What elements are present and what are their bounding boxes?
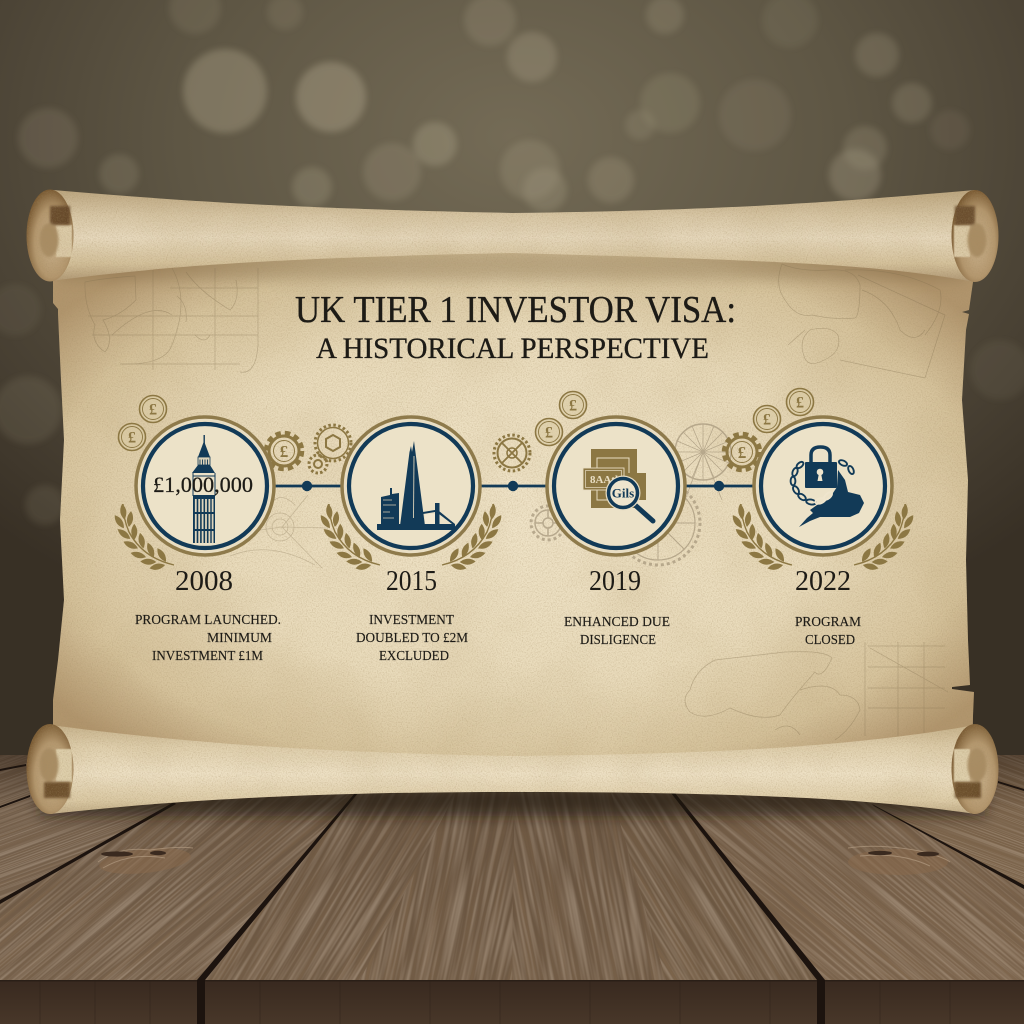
icon: faint gear right (616, 481, 700, 565)
icon: documents and magnifier: Gils (612, 486, 634, 500)
faint map: top right (779, 264, 945, 378)
icon: laurel (112, 503, 174, 571)
milestone 2015 (318, 417, 504, 664)
milestone 2022 (730, 417, 916, 648)
faint map: top left (85, 268, 258, 372)
description: CLOSED (805, 633, 855, 648)
table front edge (0, 980, 1024, 1024)
year: 2008 (175, 566, 233, 597)
icon: medallion (342, 417, 480, 555)
icon: documents and magnifier: 8AAtl (590, 475, 618, 486)
description: MINIMUM (207, 631, 273, 646)
decorative gears (118, 388, 814, 473)
icon: pound gear 2008: £ (280, 442, 288, 461)
plank gaps (0, 764, 1024, 980)
wood knots (98, 844, 950, 878)
description: ENHANCED DUE (564, 615, 670, 630)
scroll (20, 185, 1005, 820)
parchment ageing texture (20, 185, 1005, 820)
title (295, 289, 736, 365)
icon: England map, padlock and chain (791, 447, 864, 527)
year: 2022 (795, 566, 851, 597)
icon: Big Ben (192, 435, 215, 543)
icon: faint gear left (531, 506, 565, 540)
icon: hex gear (315, 425, 351, 461)
parchment sheet (53, 250, 974, 770)
description (564, 615, 670, 648)
icon: pound gear 2022: £ (738, 443, 746, 462)
icon: ferris wheel (675, 424, 731, 500)
background gears and wheel (531, 424, 731, 565)
description (135, 613, 281, 664)
icon: medallion (547, 417, 685, 555)
year: 2019 (589, 566, 641, 597)
icon: laurels (730, 503, 916, 571)
faint map: bottom right (685, 642, 948, 740)
title: A HISTORICAL PERSPECTIVE (316, 332, 709, 365)
icon: coins (118, 388, 814, 450)
background with bokeh lights (0, 0, 1024, 760)
wooden table (0, 755, 1024, 1024)
bottom roll (26, 724, 998, 814)
icon: medallion (754, 417, 892, 555)
top roll (26, 190, 998, 282)
description: INVESTMENT (369, 613, 454, 628)
amount on clock tower: £1,000,000 (153, 472, 253, 497)
description: INVESTMENT £1M (152, 649, 264, 664)
description: DISLIGENCE (580, 633, 656, 648)
description: PROGRAM LAUNCHED. (135, 613, 281, 628)
faint sketch: compass behind timeline (225, 495, 328, 568)
icon: laurels (318, 503, 504, 571)
icon: small gear (309, 455, 327, 473)
title: UK TIER 1 INVESTOR VISA: (295, 289, 736, 331)
icon: pound gear 2022 (724, 434, 760, 470)
icon: pound gear 2008 (266, 433, 302, 469)
icon: medallion (136, 417, 274, 555)
milestone 2019 (547, 417, 685, 648)
milestone 2008 (112, 417, 281, 664)
description: EXCLUDED (379, 649, 449, 664)
description: PROGRAM (795, 615, 862, 630)
icon: spoked gear (494, 435, 530, 471)
timeline connector (270, 481, 758, 491)
description (356, 613, 469, 664)
icon: documents and magnifier (583, 449, 653, 521)
icon: Shard and Tower Bridge (377, 441, 455, 530)
description (795, 615, 862, 648)
year: 2015 (386, 566, 437, 597)
description: DOUBLED TO £2M (356, 631, 469, 646)
